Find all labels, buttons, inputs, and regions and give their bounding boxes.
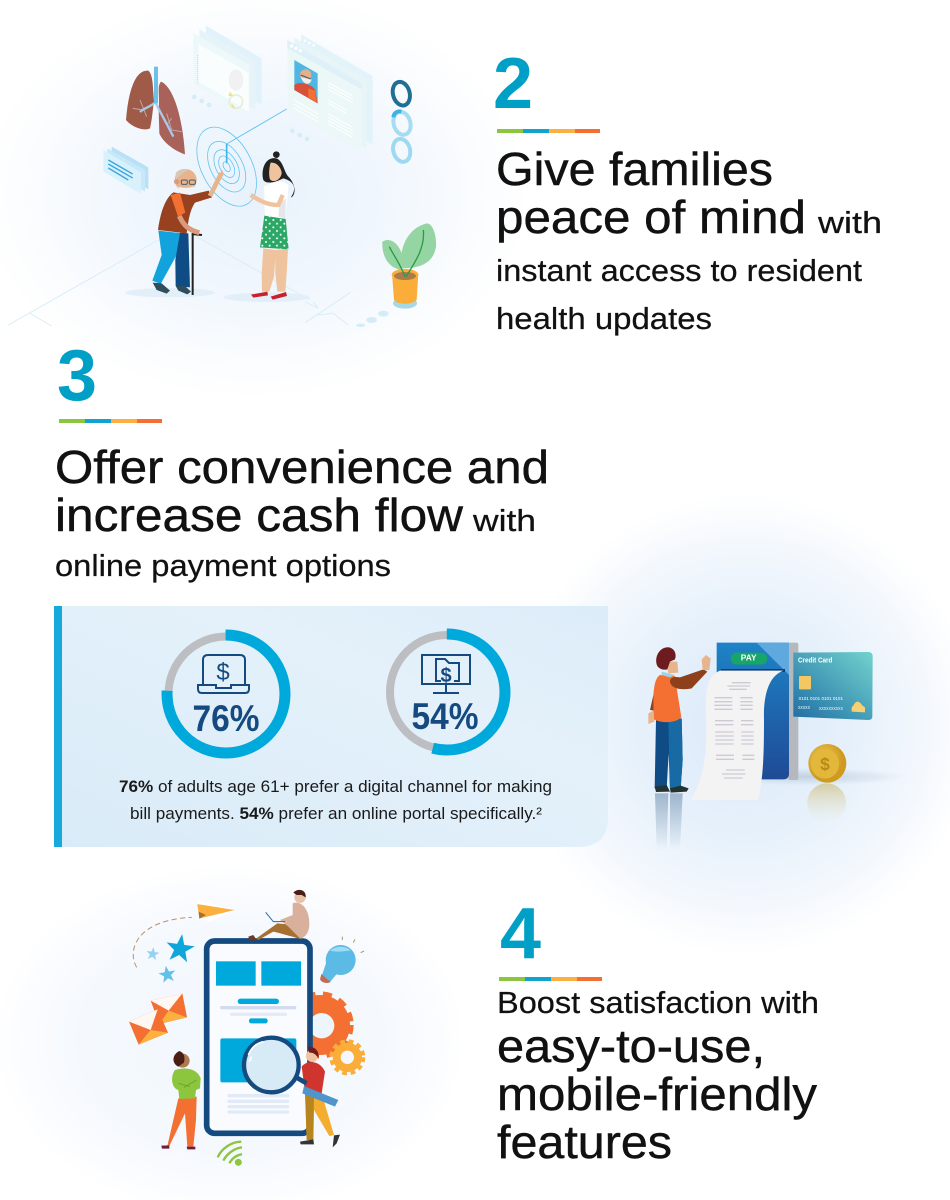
icon: wifi — [218, 1142, 242, 1165]
icon: envelopes — [129, 993, 187, 1045]
laptop dollar sign: $ — [216, 659, 230, 686]
icon: progress rings — [390, 80, 413, 164]
section 4 heading: easy-to-use, — [497, 1020, 765, 1072]
stepping dots — [356, 311, 389, 327]
section 3 accent rule — [59, 419, 162, 423]
section 2 heading: health updates — [496, 301, 712, 336]
figure: man in green — [161, 1051, 201, 1149]
screen: resident profile — [287, 34, 373, 152]
icon: monitor with dollar folder — [422, 655, 470, 693]
screen: lungs record — [192, 26, 262, 118]
section 4 accent rule — [499, 977, 602, 981]
icon: lungs — [126, 67, 185, 154]
floor lines — [8, 237, 350, 326]
profile photo — [294, 60, 318, 103]
pay button: PAY — [741, 653, 757, 663]
section 4 heading — [497, 985, 819, 1168]
section 4 number: 4 — [500, 894, 541, 974]
monitor dollar sign: $ — [440, 665, 452, 687]
icon: potted plant — [382, 223, 436, 309]
section 3 heading: with — [472, 503, 536, 538]
54% value: 54% — [412, 696, 478, 737]
icon: light bulb — [320, 937, 364, 983]
section 2 number: 2 — [493, 44, 533, 124]
section 2 heading: peace of mind — [496, 191, 806, 243]
icon: touch target rings — [185, 109, 287, 216]
caption — [119, 778, 552, 823]
icon: small document stack — [103, 147, 148, 194]
section 2 heading: Give families — [496, 143, 773, 195]
section 3 heading: Offer convenience and — [55, 441, 549, 493]
76% value: 76% — [192, 698, 260, 739]
figure: woman with magnifying glass — [300, 1047, 340, 1147]
figure: older man with cane — [152, 169, 223, 295]
receipt — [691, 671, 783, 800]
figure: man paying — [648, 647, 711, 793]
magnifying glass — [244, 1038, 307, 1092]
caption: bill payments. 54% prefer an online portal specifically.² — [130, 805, 543, 823]
credit card: XXXXX — [798, 705, 811, 710]
reflections — [655, 783, 846, 850]
phone — [717, 643, 798, 780]
section 2 accent rule — [497, 129, 600, 133]
icon: stars — [145, 932, 196, 983]
coin — [808, 744, 846, 783]
credit card: 0101 0101 0101 0101 — [799, 696, 843, 702]
illustration: family health portal — [8, 26, 436, 327]
donut chart: 54% — [389, 634, 505, 750]
floor shadow — [707, 768, 907, 785]
caption: 76% of adults age 61+ prefer a digital channel for making — [119, 778, 552, 796]
phone — [207, 941, 310, 1133]
donut chart: 76% — [167, 635, 285, 753]
section 2 heading — [496, 143, 882, 336]
section 3 heading: online payment options — [55, 548, 391, 583]
illustration: paying online — [648, 643, 907, 850]
section 4 heading: Boost satisfaction with — [497, 985, 819, 1020]
section 3 heading: increase cash flow — [55, 489, 464, 541]
floor shadows — [125, 288, 310, 302]
credit card — [793, 652, 873, 720]
section 3 number: 3 — [57, 336, 97, 416]
coin: $ — [820, 754, 830, 774]
figure: person with laptop on phone — [248, 890, 309, 941]
section 2 heading: instant access to resident — [496, 253, 862, 288]
panel: digital payment stats — [54, 606, 608, 847]
figure: woman with green skirt — [251, 151, 295, 300]
section 3 heading — [55, 441, 549, 583]
icon: laptop with dollar — [198, 655, 249, 693]
icon: gears — [290, 995, 363, 1073]
section 4 heading: features — [497, 1116, 672, 1168]
paper plane and dashed path — [133, 900, 235, 967]
illustration: mobile friendly app — [129, 890, 364, 1165]
credit card: XXXXXXXXXX — [819, 706, 844, 711]
credit card: Credit Card — [798, 657, 832, 664]
section 2 heading: with — [817, 205, 882, 240]
section 4 heading: mobile-friendly — [497, 1068, 817, 1120]
